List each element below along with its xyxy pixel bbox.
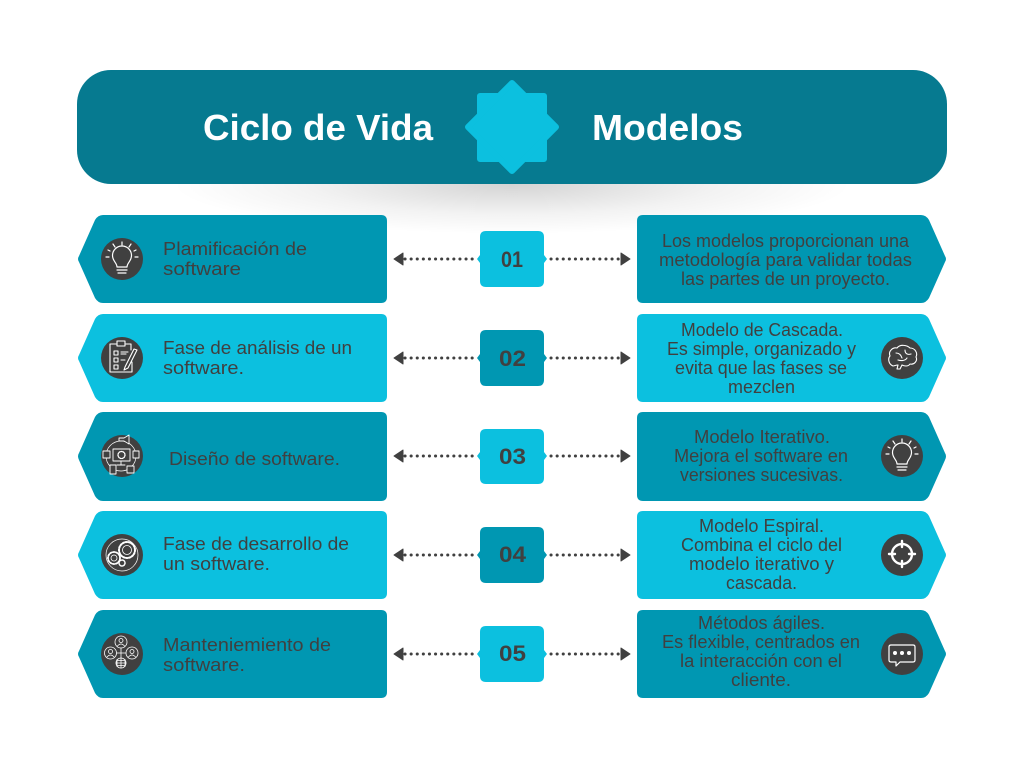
right arrow — [551, 450, 630, 462]
icon: design monitor — [101, 435, 143, 477]
left arrow — [394, 253, 477, 265]
text: la interacción con el — [680, 651, 842, 671]
text — [674, 427, 848, 485]
header banner — [77, 70, 947, 184]
badge 01 — [477, 231, 547, 287]
text — [662, 613, 860, 690]
title: Ciclo de Vida: Ciclo de Vida — [203, 107, 434, 148]
icon: brain — [881, 337, 923, 379]
icon: users network — [101, 633, 143, 675]
text: Diseño de software. — [169, 449, 340, 469]
right panel 1 — [637, 215, 946, 303]
left arrow — [394, 648, 477, 660]
text: cascada. — [726, 573, 797, 593]
text: Métodos ágiles. — [698, 613, 825, 633]
text: versiones sucesivas. — [680, 465, 843, 485]
text: Fase de desarrollo de — [163, 534, 349, 554]
right panel 4 — [637, 511, 946, 599]
text — [659, 231, 912, 289]
text: cliente. — [731, 670, 791, 690]
left arrow — [394, 352, 477, 364]
text: software — [163, 259, 241, 279]
connector row 1 — [394, 231, 630, 287]
text — [163, 635, 331, 675]
text: Los modelos proporcionan una — [662, 231, 910, 251]
text: las partes de un proyecto. — [681, 269, 890, 289]
right panel 3 — [637, 412, 946, 501]
badge 02 — [477, 330, 547, 386]
right arrow — [551, 253, 630, 265]
icon: checklist — [101, 337, 143, 379]
text — [163, 338, 352, 378]
connector row 2 — [394, 330, 630, 386]
icon: gears — [101, 534, 143, 576]
text: Plamificación de — [163, 239, 307, 259]
text: Es simple, organizado y — [667, 339, 856, 359]
left panel 2 — [78, 314, 387, 402]
badge 05: 05 — [499, 641, 526, 666]
connector row 5 — [394, 626, 630, 682]
badge 03: 03 — [499, 444, 526, 469]
text: metodología para validar todas — [659, 250, 912, 270]
left panel 1 — [78, 215, 387, 303]
text: Mejora el software en — [674, 446, 848, 466]
badge 01: 01 — [501, 247, 523, 272]
left panel 4 — [78, 511, 387, 599]
text — [163, 534, 349, 574]
left arrow — [394, 450, 477, 462]
connector row 4 — [394, 527, 630, 583]
text: Es flexible, centrados en — [662, 632, 860, 652]
text: mezclen — [728, 377, 795, 397]
icon: chat bubble — [881, 633, 923, 675]
left arrow — [394, 549, 477, 561]
text: Modelo Iterativo. — [694, 427, 830, 447]
text: evita que las fases se — [675, 358, 847, 378]
text: software. — [163, 358, 244, 378]
text: Manteniemiento de — [163, 635, 331, 655]
right panel 5 — [637, 610, 946, 698]
badge 05 — [477, 626, 547, 682]
text — [667, 320, 856, 397]
title: Modelos: Modelos — [592, 107, 743, 148]
text: Modelo de Cascada. — [681, 320, 843, 340]
left panel 3 — [78, 412, 387, 501]
connector row 3 — [394, 429, 630, 484]
left panel 5 — [78, 610, 387, 698]
text: modelo iterativo y — [689, 554, 834, 574]
badge 02: 02 — [499, 346, 526, 371]
text — [681, 516, 842, 593]
icon: light bulb — [881, 435, 923, 477]
icon: light bulb — [101, 238, 143, 280]
text: Fase de análisis de un — [163, 338, 352, 358]
right panel 2 — [637, 314, 946, 402]
text: Modelo Espiral. — [699, 516, 824, 536]
right arrow — [551, 648, 630, 660]
badge 03 — [477, 429, 547, 484]
icon: target — [881, 534, 923, 576]
text: Combina el ciclo del — [681, 535, 842, 555]
text — [163, 239, 307, 279]
text: software. — [163, 655, 245, 675]
badge 04 — [477, 527, 547, 583]
center star — [468, 83, 556, 171]
right arrow — [551, 352, 630, 364]
badge 04: 04 — [499, 542, 527, 567]
right arrow — [551, 549, 630, 561]
text: un software. — [163, 554, 270, 574]
